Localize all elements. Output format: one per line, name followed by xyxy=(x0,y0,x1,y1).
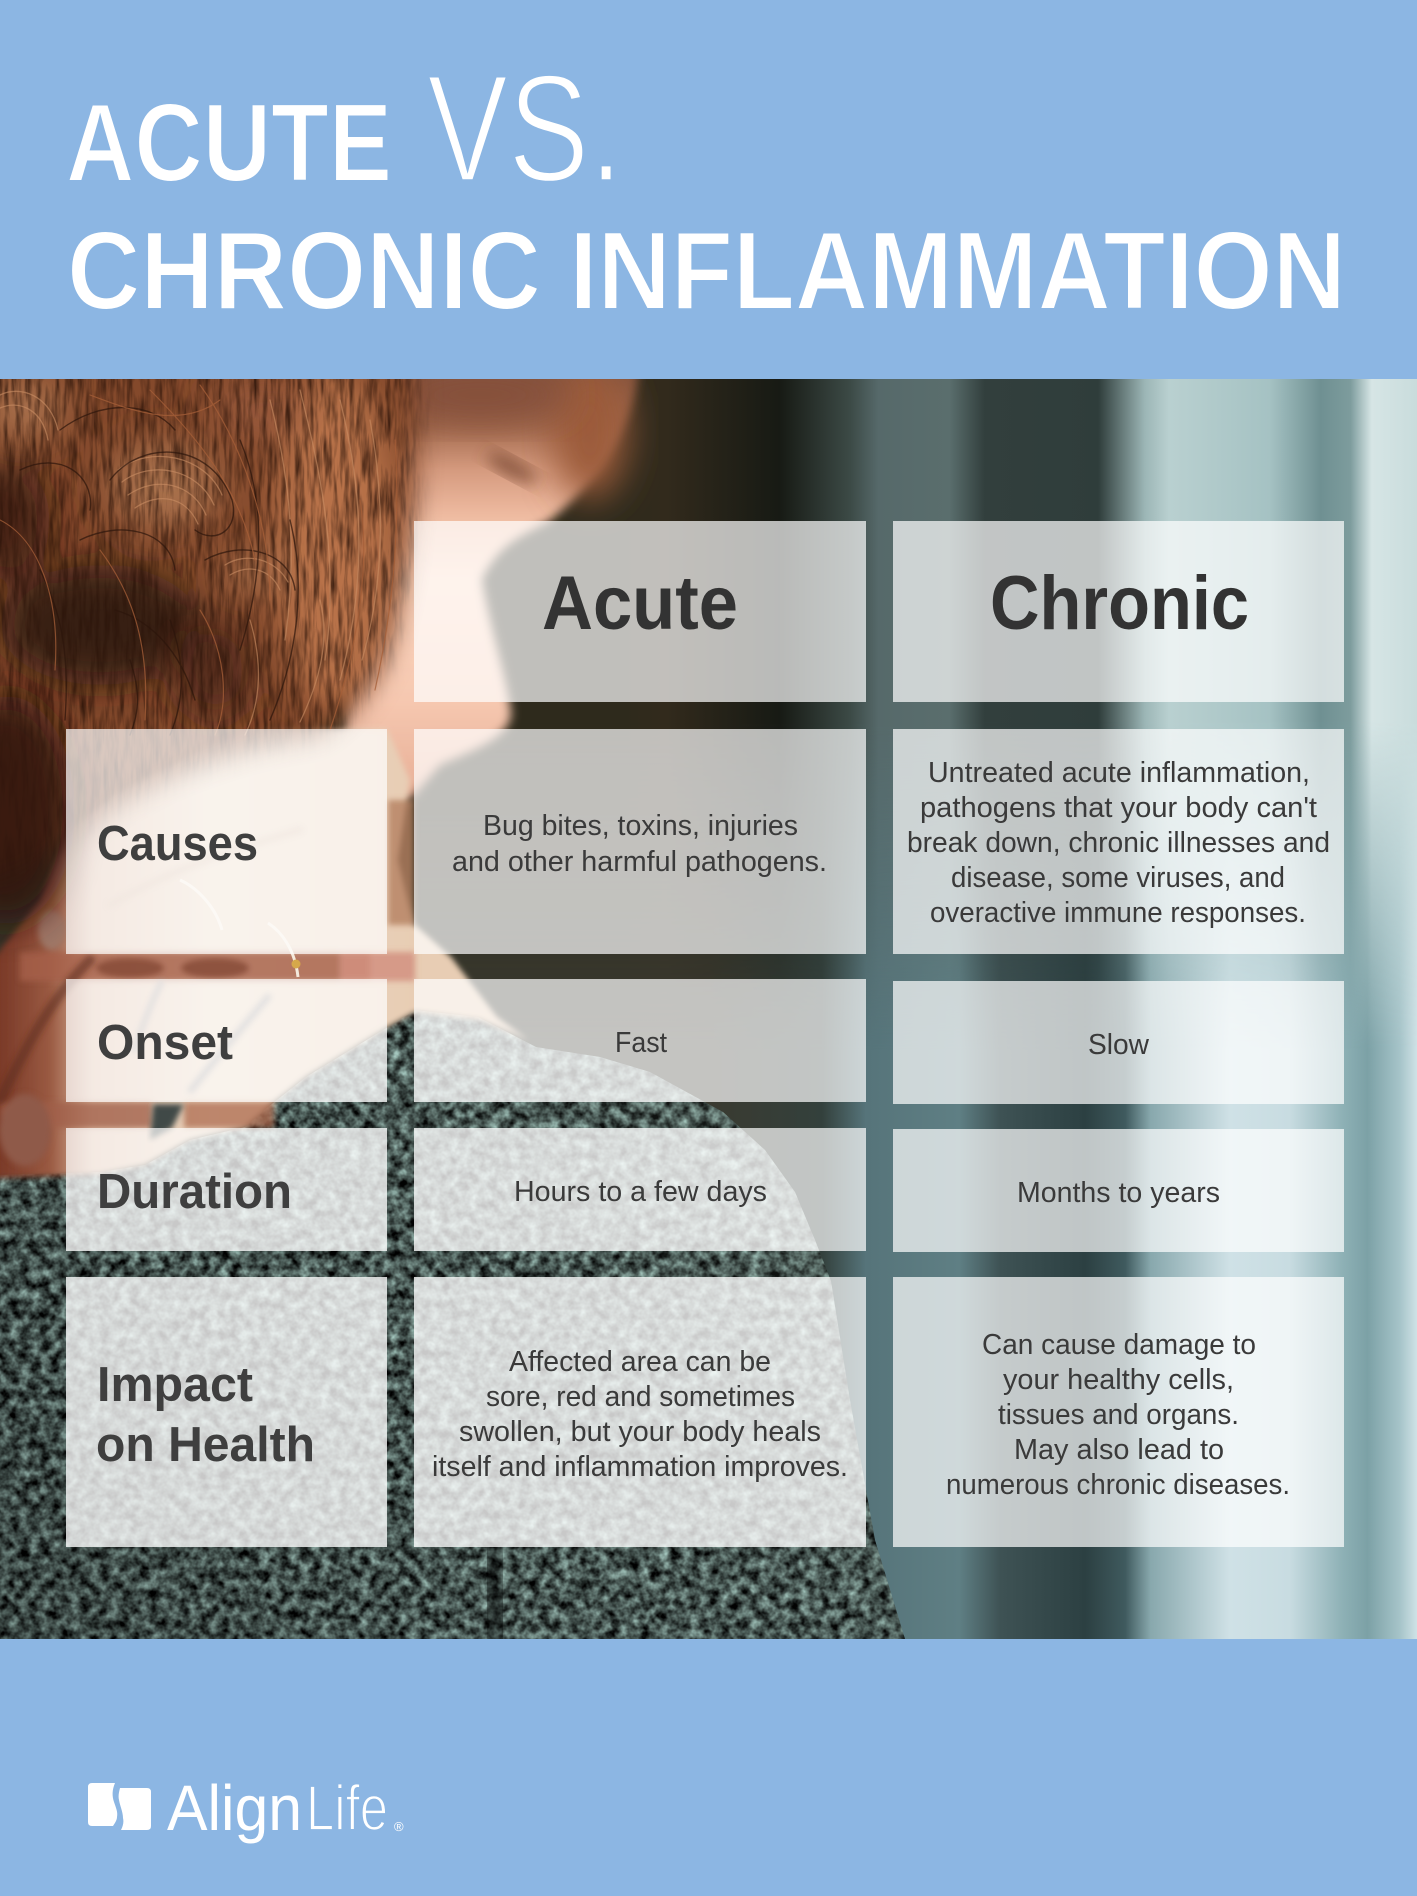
title xyxy=(66,43,1346,333)
panel: chronic causes: Untreated acute inflammation, xyxy=(928,757,1310,789)
background photo: woman holding her shoulder xyxy=(0,300,1417,1645)
panel: Impact on Health label: on Health xyxy=(96,1418,315,1472)
mid hair strands xyxy=(0,385,397,735)
skin tones in the gaps between panels xyxy=(0,800,415,1166)
panel: chronic impact: May also lead to xyxy=(1014,1434,1224,1466)
panel: chronic causes xyxy=(893,729,1344,954)
panel: Acute heading xyxy=(414,521,866,702)
hand resting on the shoulder xyxy=(0,729,528,1178)
panel: Duration label xyxy=(66,1128,387,1251)
panel: Onset label xyxy=(66,979,387,1102)
dark hair strands xyxy=(20,408,298,735)
logo wordmark: Align xyxy=(167,1772,302,1844)
lit knit beneath the panels xyxy=(66,979,866,1547)
panel: Causes label xyxy=(66,729,387,954)
panel: Impact on Health label: Impact xyxy=(97,1358,253,1412)
panel: Chronic heading: Chronic xyxy=(990,561,1249,646)
panel: chronic impact: numerous chronic diseases. xyxy=(946,1469,1290,1501)
panel: Causes label: Causes xyxy=(97,817,258,871)
footer band xyxy=(0,1639,1417,1896)
panel: chronic impact: Can cause damage to xyxy=(982,1329,1256,1361)
window and curtain backdrop xyxy=(0,379,1417,1639)
panel: chronic causes: disease, some viruses, and xyxy=(951,862,1285,894)
curly hair xyxy=(0,379,434,858)
sweater showing between fingers xyxy=(150,1104,184,1140)
panel: Duration label: Duration xyxy=(97,1165,292,1219)
panel: chronic impact xyxy=(893,1277,1344,1547)
AlignLife logo xyxy=(88,1772,404,1844)
panel: acute impact: sore, red and sometimes xyxy=(486,1381,795,1413)
panel: acute impact xyxy=(414,1277,866,1547)
panel: chronic causes: pathogens that your body can't xyxy=(920,792,1317,824)
icon: logo mark xyxy=(88,1783,151,1830)
panel: chronic onset xyxy=(893,981,1344,1104)
panel: chronic causes: break down, chronic illnesses and xyxy=(907,827,1330,859)
light hair strands xyxy=(0,390,380,735)
panel: chronic impact: your healthy cells, xyxy=(1003,1364,1234,1396)
panel: chronic duration xyxy=(893,1129,1344,1252)
panel: Acute heading: Acute xyxy=(542,561,738,646)
panel: chronic impact: tissues and organs. xyxy=(998,1399,1239,1431)
title word: VS.: VS. xyxy=(427,43,623,214)
face, blurred in profile xyxy=(340,340,640,800)
panel: chronic causes: overactive immune responses. xyxy=(930,897,1306,929)
sweater with knit texture xyxy=(0,979,910,1645)
panel: acute causes: and other harmful pathogens. xyxy=(452,846,827,878)
registered mark: ® xyxy=(394,1819,404,1834)
panel: acute impact: itself and inflammation improves. xyxy=(432,1451,848,1483)
panel: acute impact: Affected area can be xyxy=(509,1346,771,1378)
panel: acute duration xyxy=(414,1128,866,1251)
panel: Chronic heading xyxy=(893,521,1344,702)
panel: acute causes xyxy=(414,729,866,954)
panel: chronic onset: Slow xyxy=(1088,1029,1150,1061)
rings xyxy=(180,880,298,977)
finger shadows xyxy=(0,954,271,1106)
panel: Impact on Health label xyxy=(66,1277,387,1547)
panel: acute impact: swollen, but your body heals xyxy=(459,1416,821,1448)
panel: acute duration: Hours to a few days xyxy=(514,1176,767,1208)
logo wordmark light part: Life xyxy=(306,1772,388,1844)
title word: ACUTE: ACUTE xyxy=(66,81,392,205)
panel: acute onset: Fast xyxy=(615,1027,667,1059)
header band xyxy=(0,0,1417,379)
comparison table xyxy=(66,521,1344,1547)
shadow behind neck on the left xyxy=(0,695,75,925)
panel: acute onset xyxy=(414,979,866,1102)
panel: acute causes: Bug bites, toxins, injuries xyxy=(483,810,798,842)
panel: chronic duration: Months to years xyxy=(1017,1177,1220,1209)
panel: Onset label: Onset xyxy=(97,1016,233,1070)
